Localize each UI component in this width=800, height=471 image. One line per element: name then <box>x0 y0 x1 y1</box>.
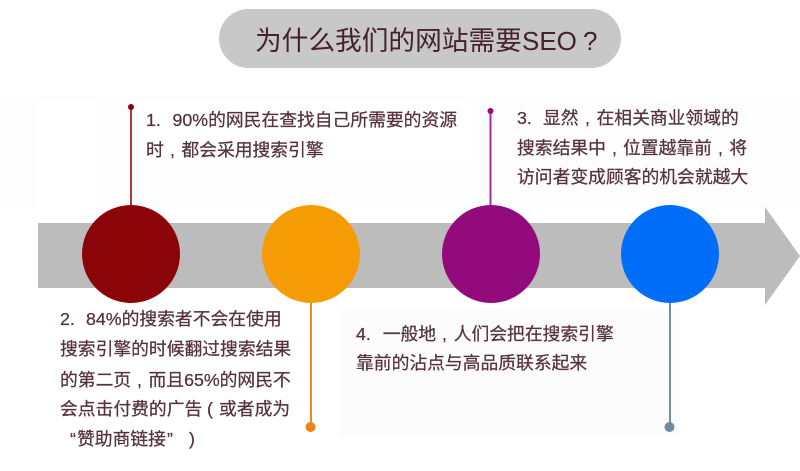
text block 2: “ <box>70 429 76 449</box>
text block 4: 4. <box>356 324 371 344</box>
text block 2: 或者成为 <box>219 399 290 419</box>
text block 2: ( <box>207 399 213 419</box>
text block 2: , <box>137 370 142 390</box>
text block 2: 而且65%的网民不 <box>148 370 291 390</box>
title: SEO <box>522 26 577 56</box>
text block 4: 靠前的沾点与高品质联系起来 <box>356 353 587 373</box>
timeline arrow <box>38 207 800 305</box>
text block 2 <box>60 309 291 449</box>
text block 2: ) <box>189 429 195 449</box>
milestone 4 marker <box>621 205 719 432</box>
text block 1 <box>146 110 457 160</box>
title: 为什么我们的网站需要 <box>255 26 522 56</box>
text block 4: , <box>442 324 447 344</box>
text block 1: 1. <box>146 110 161 130</box>
text block 3: , <box>585 108 590 128</box>
text block 2: 2. <box>60 309 75 329</box>
text block 4: 一般地 <box>383 324 436 344</box>
text block 2: 会点击付费的广告 <box>60 399 202 419</box>
text block 4 <box>356 324 614 373</box>
text block 2: 赞助商链接 <box>77 429 166 449</box>
text block 3: , <box>718 138 723 158</box>
title: ? <box>583 26 597 56</box>
text block 3: 显然 <box>543 108 579 128</box>
text block 2: 搜索引擎的时候翻过搜索结果 <box>60 339 291 359</box>
milestone 3 marker <box>442 108 540 303</box>
text block 1: 90%的网民在查找自己所需要的资源 <box>172 110 457 130</box>
title <box>219 9 621 68</box>
text block 3 <box>517 108 748 187</box>
text block 4: 人们会把在搜索引擎 <box>454 324 614 344</box>
milestone 2 marker <box>262 205 360 432</box>
text block 3: 在相关商业领域的 <box>596 108 739 128</box>
text block 1: 时 <box>146 140 164 160</box>
text block 2: 的第二页 <box>60 370 131 390</box>
text block 1: 都会采用搜索引擎 <box>181 140 324 160</box>
text block 3: 3. <box>517 108 532 128</box>
text block 3: , <box>612 138 617 158</box>
text block 3: 位置越靠前 <box>623 138 712 158</box>
text block 2: ” <box>167 429 173 449</box>
text block 1: , <box>170 140 175 160</box>
text block 3: 访问者变成顾客的机会就越大 <box>517 167 748 187</box>
text block 3: 将 <box>729 138 747 158</box>
milestone 1 marker <box>82 104 180 303</box>
text block 3: 搜索结果中 <box>517 138 606 158</box>
text block 2: 84%的搜索者不会在使用 <box>86 309 282 329</box>
